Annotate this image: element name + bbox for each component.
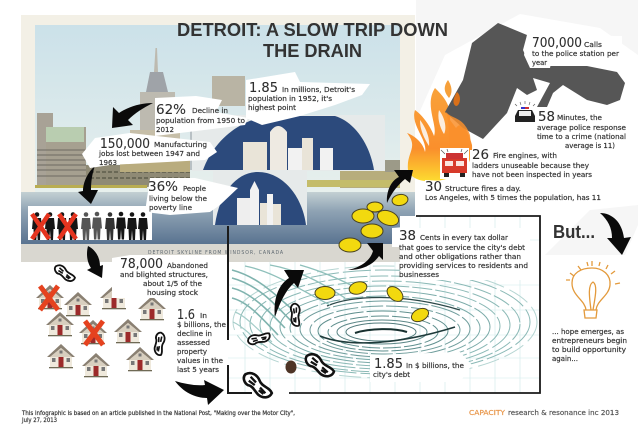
text: 62%: 62%	[156, 102, 186, 118]
text: 36%: 36%	[148, 179, 178, 195]
footer source: July 27, 2013	[21, 418, 57, 424]
text: 38 cents: 38	[399, 228, 416, 244]
text: 1.85 debt: 1.85	[374, 356, 403, 372]
arrow: debt up	[348, 243, 383, 270]
text: 26 fire engines: ladders unuseable because they	[472, 161, 590, 170]
red crosses on houses	[40, 286, 103, 345]
text: 1.6: In	[200, 311, 207, 320]
arrow: housing to debt	[175, 380, 224, 405]
water	[21, 192, 415, 246]
text: 1.85 debt: city's debt	[373, 370, 410, 379]
footer source	[21, 411, 295, 424]
icon: fire truck	[440, 148, 469, 179]
text: 30 structure fires: 30	[425, 179, 442, 195]
text: hope: again...	[552, 354, 578, 363]
text: 700,000: year	[532, 58, 547, 67]
people silhouettes	[28, 206, 152, 240]
text: 1.6: property	[177, 347, 208, 356]
text: 58 minutes: average police response	[537, 123, 627, 132]
text: 62%: population from 1950 to	[156, 116, 246, 125]
text: 78,000: housing stock	[147, 288, 199, 297]
text: 150,000: Manufacturing	[154, 140, 207, 149]
sketch border	[228, 216, 540, 393]
arrow: jobs to poverty	[78, 166, 98, 204]
text: 1.85 population: In millions, Detroit's	[282, 85, 355, 94]
panel: postcard skyline	[21, 15, 415, 262]
footer credit: CAPACITY	[469, 408, 506, 417]
panel: city dome lower	[213, 171, 307, 225]
text: 700,000: to the police station per	[532, 49, 619, 58]
text: 26 fire engines: have not been inspected in years	[472, 170, 592, 179]
text: hope: to build opportunity	[552, 345, 627, 354]
text: 1.6: last 5 years	[177, 365, 219, 374]
text: 30 structure fires	[425, 179, 601, 202]
heading: but: But...	[553, 222, 595, 242]
icon: sinking house	[286, 360, 296, 374]
text: 38 cents: and other obligations rather than	[399, 252, 521, 261]
red crosses	[32, 214, 76, 239]
text: 58 minutes	[537, 109, 627, 150]
arrow: poverty to housing	[87, 246, 103, 278]
text: 1.85 debt	[373, 356, 464, 379]
text: 150,000: jobs lost between 1947 and	[98, 149, 200, 158]
text: 62%: 2012	[156, 125, 174, 134]
text: 36%: poverty line	[149, 203, 192, 212]
gold coins	[315, 193, 431, 324]
skyline buildings	[35, 48, 400, 188]
text: 36%: People	[183, 184, 206, 193]
text: 26 fire engines: 26	[472, 147, 489, 163]
text: 150,000: 150,000	[100, 136, 150, 152]
text: 62%: Decline in	[192, 106, 228, 115]
arrow: coins to fire	[387, 170, 413, 203]
title: THE DRAIN	[263, 41, 362, 61]
text: 36%: living below the	[149, 194, 208, 203]
text: 30 structure fires: Structure fires a day.	[445, 184, 521, 193]
text: 30 structure fires: Los Angeles, with 5 times the population, has 11	[425, 193, 601, 202]
text: 1.85 population: population in 1952, it's	[248, 94, 332, 103]
text: 1.6: $ billions, the	[177, 320, 226, 329]
text: 1.85 population	[248, 80, 355, 112]
text: 38 cents: providing services to residents and	[399, 261, 528, 270]
arrow: up from whirlpool	[275, 270, 304, 317]
text: 700,000	[532, 35, 619, 67]
houses	[36, 285, 166, 377]
text: 58 minutes: time to a crime (national	[537, 132, 626, 141]
small flame	[446, 112, 470, 160]
arrow: but	[600, 213, 631, 255]
text: 700,000: 700,000	[532, 35, 582, 51]
text: 78,000: Abandoned	[167, 261, 208, 270]
title: DETROIT: A SLOW TRIP DOWN	[177, 20, 448, 40]
white text backings	[82, 35, 630, 382]
text: 58 minutes: Minutes, the	[557, 113, 603, 122]
arrow: population to jobs	[112, 103, 153, 128]
caption: DETROIT SKYLINE FROM WINDSOR, CANADA	[148, 250, 284, 256]
text: 26 fire engines: Fire engines, with	[493, 151, 557, 160]
text: 1.6: assessed	[177, 338, 210, 347]
text: 1.85 population: highest point	[248, 103, 296, 112]
footer source: This infographic is based on an article published in the National Post, "Making over the Motor City",	[21, 411, 295, 417]
text: hope: ... hope emerges, as	[552, 327, 624, 336]
icon: police car	[513, 100, 537, 123]
footer credit: research & resonance inc 2013	[508, 408, 619, 417]
whirlpool strokes	[232, 265, 537, 378]
text: 38 cents: that goes to service the city's debt	[399, 243, 525, 252]
text: 78,000: 78,000	[120, 256, 163, 272]
icon: gun silhouette	[445, 23, 625, 139]
text: hope	[552, 327, 627, 363]
text: 78,000: about 1/5 of the	[143, 279, 203, 288]
text: 150,000: 1963	[99, 158, 117, 167]
text: 1.6	[177, 307, 226, 374]
panel: whirlpool sketch	[228, 216, 540, 393]
text: 62%	[156, 102, 246, 134]
panel: city dome top	[192, 115, 385, 171]
text: 1.6: 1.6	[177, 307, 195, 323]
text: 38 cents: businesses	[399, 270, 439, 279]
text: 78,000: and blighted structures,	[120, 270, 208, 279]
text: 36%	[148, 179, 208, 212]
text: 700,000: Calls	[584, 40, 602, 49]
icon: light bulb	[566, 261, 620, 318]
text: 1.85 debt: In $ billions, the	[406, 361, 464, 370]
text: 150,000	[98, 136, 207, 167]
text: 38 cents: Cents in every tax dollar	[420, 233, 508, 242]
text: 1.85 population: 1.85	[249, 80, 278, 96]
icon: dollar notes	[52, 264, 337, 400]
text: 58 minutes: 58	[538, 109, 555, 125]
title	[177, 20, 448, 61]
text: hope: entrepreneurs begin	[552, 336, 627, 345]
text: 1.6: decline in	[177, 329, 212, 338]
text: 78,000	[120, 256, 208, 297]
fire flames	[407, 88, 472, 181]
text: 58 minutes: average is 11)	[565, 141, 615, 150]
text: 38 cents	[399, 228, 528, 279]
text: 1.6: values in the	[177, 356, 223, 365]
background swooshes	[416, 0, 638, 255]
text: 26 fire engines	[472, 147, 592, 179]
notebook grid	[228, 216, 540, 393]
